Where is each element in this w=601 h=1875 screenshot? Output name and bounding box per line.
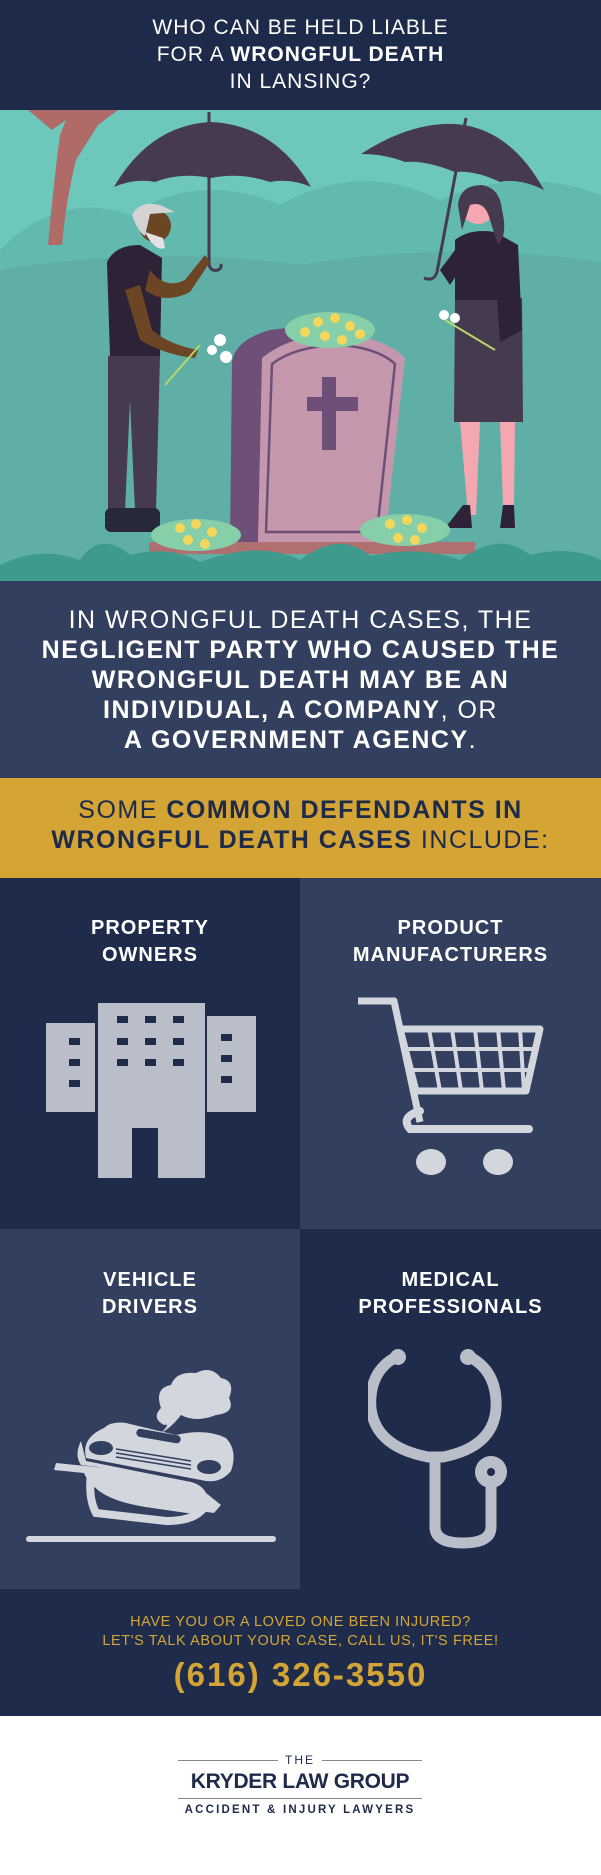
cell title: VEHICLE (103, 1269, 197, 1291)
panel: product manufacturers (300, 878, 601, 1229)
title: WHO CAN BE HELD LIABLE (152, 16, 449, 39)
cell title (358, 1269, 543, 1318)
bushes (0, 544, 601, 581)
illustration: graveside mourners (0, 110, 601, 581)
cta text: HAVE YOU OR A LOVED ONE BEEN INJURED? (130, 1614, 471, 1630)
text block: IN WRONGFUL DEATH CASES, THE (69, 606, 532, 634)
text block: NEGLIGENT PARTY WHO CAUSED THE (42, 636, 559, 664)
panel: call to action (0, 1589, 601, 1716)
panel: statement (0, 581, 601, 778)
panel: vehicle drivers (0, 1229, 300, 1589)
icon: buildings (46, 1003, 256, 1178)
logo (178, 1753, 422, 1816)
cell title: PRODUCT (398, 917, 503, 939)
text block: INDIVIDUAL, A COMPANY, OR (103, 696, 498, 724)
cell title: DRIVERS (102, 1296, 198, 1318)
panel: defendants heading (0, 778, 601, 878)
icon: shopping cart (358, 998, 544, 1175)
base (149, 542, 475, 554)
title (152, 16, 449, 93)
text block: A GOVERNMENT AGENCY. (124, 726, 477, 754)
cell title: PROFESSIONALS (358, 1296, 543, 1318)
icon: stethoscope (368, 1349, 507, 1548)
cell title: MANUFACTURERS (353, 944, 548, 966)
icon: overturned car (26, 1370, 276, 1542)
ground flowers (151, 514, 450, 551)
panel: property owners (0, 878, 300, 1229)
cell title: PROPERTY (91, 917, 209, 939)
woman (439, 185, 523, 528)
umbrella left (114, 112, 311, 270)
cell title (91, 917, 209, 966)
tree (28, 110, 118, 245)
cta text (102, 1614, 499, 1649)
heading (51, 796, 550, 854)
logo: KRYDER LAW GROUP (191, 1770, 409, 1793)
heading: WRONGFUL DEATH CASES INCLUDE: (51, 826, 550, 854)
text block: WRONGFUL DEATH MAY BE AN (92, 666, 509, 694)
heading: SOME COMMON DEFENDANTS IN (78, 796, 523, 824)
tombstone (230, 328, 405, 542)
cell title (102, 1269, 198, 1318)
title: FOR A WRONGFUL DEATH (157, 43, 444, 66)
text block (42, 606, 559, 754)
title: IN LANSING? (230, 70, 371, 93)
flowers left hand (165, 334, 232, 385)
panel: medical professionals (300, 1229, 601, 1589)
cell title: OWNERS (102, 944, 198, 966)
logo: ACCIDENT & INJURY LAWYERS (185, 1804, 415, 1816)
cell title: MEDICAL (401, 1269, 500, 1291)
umbrella right (361, 118, 544, 279)
flowers on top (285, 312, 375, 348)
cell title (353, 917, 548, 966)
logo: THE (285, 1753, 315, 1767)
header (0, 0, 601, 110)
phone number: (616) 326-3550 (174, 1656, 427, 1693)
man (105, 204, 210, 532)
cta text: LET'S TALK ABOUT YOUR CASE, CALL US, IT'S FREE! (102, 1633, 499, 1649)
